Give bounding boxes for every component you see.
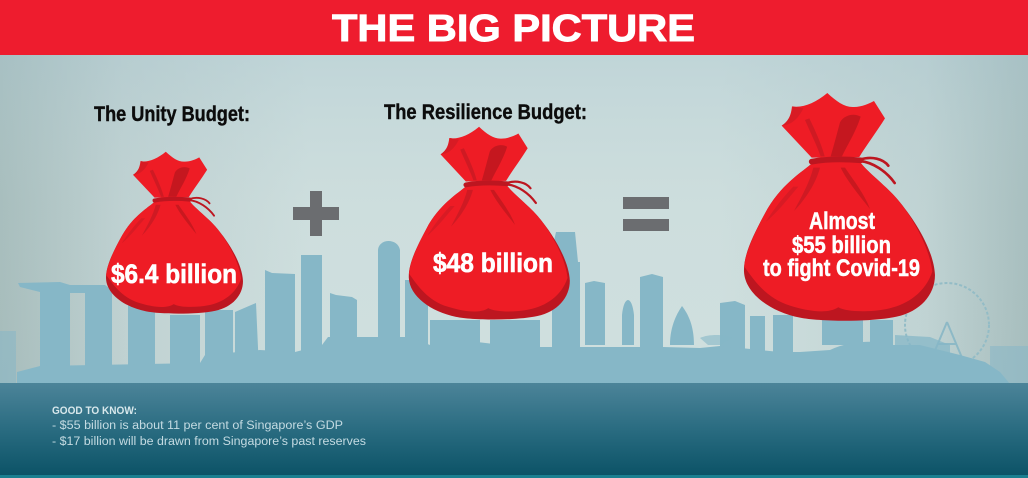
skyline silhouette [0,232,1028,384]
title banner: THE BIG PICTURE [332,8,695,50]
money bag: total: $55 billion [792,232,891,259]
label: resilience budget: The Resilience Budget: [384,101,587,124]
money bag: resilience budget [409,127,570,319]
good to know heading: GOOD TO KNOW: [52,405,137,417]
title banner [0,0,1028,55]
note 2: - $17 billion will be drawn from Singapore’s past reserves [52,436,366,448]
plus sign [293,191,339,236]
label: unity budget: The Unity Budget: [94,103,250,126]
wheel [905,283,989,372]
note 1: - $55 billion is about 11 per cent of Singapore’s GDP [52,420,343,432]
money bag: total: to fight Covid-19 [763,255,920,282]
sky background [0,55,1028,384]
equals sign [623,197,669,231]
money bag: total: Almost [809,208,875,235]
sea band with notes [0,383,1028,478]
money bag: unity budget [106,152,243,314]
money bag: resilience budget: $48 billion [433,248,553,278]
money bag: total [744,93,935,321]
money bag: unity budget: $6.4 billion [111,259,237,289]
